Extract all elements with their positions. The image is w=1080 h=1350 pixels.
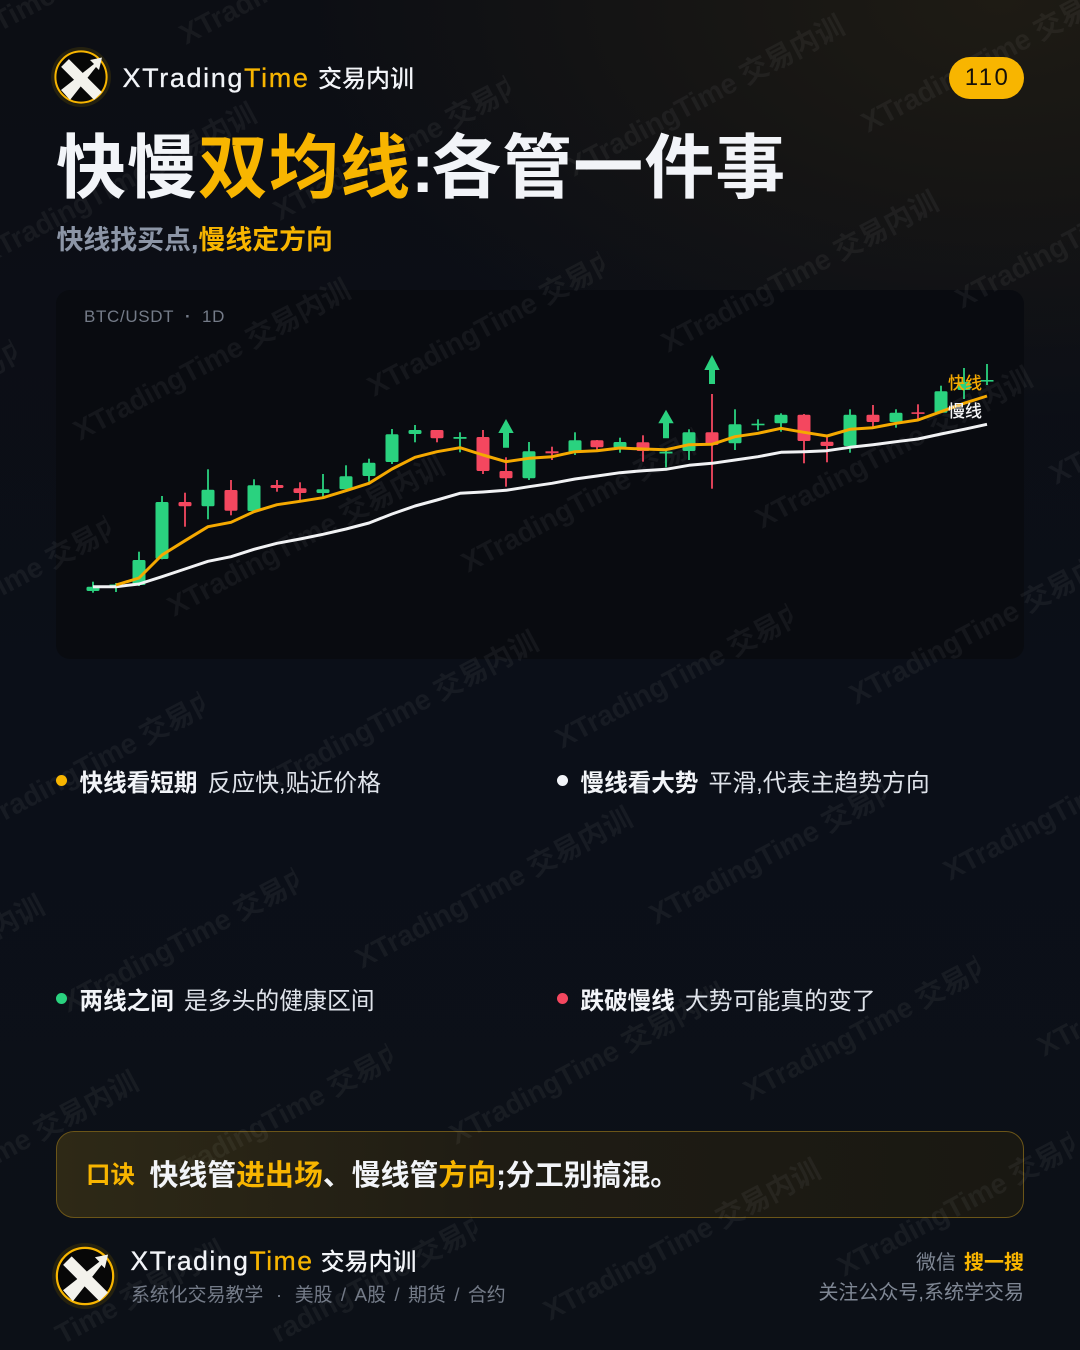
callout text: 快线管进出场、慢线管方向;分工别搞混。: [150, 1160, 679, 1192]
footer follow text: 关注公众号,系统学交易: [818, 1282, 1024, 1304]
watermark layer: XTradingTime 交易内训: [56, 846, 344, 1019]
icon: header logo: [51, 47, 111, 107]
watermark layer: XTradingTime 交易内训: [362, 230, 650, 403]
watermark layer: radingTime 交易内训: [266, 1192, 523, 1349]
footer tagline: 系统化交易教学 · 美股 / A股 / 期货 / 合约: [131, 1285, 506, 1306]
arrow: buy signal 2: [658, 410, 674, 438]
watermark layer: Time 交易内训: [50, 1235, 231, 1350]
bullet: fast line: [56, 770, 381, 797]
dot: [557, 775, 568, 786]
footer wechat search: 微信 搜一搜: [916, 1252, 1024, 1274]
watermark layer: XTradingTime 交易内训: [738, 934, 1026, 1107]
line: fast moving average: [116, 396, 987, 585]
watermark layer: XTradingTime 交易内训: [562, 10, 850, 183]
green candles: [86, 364, 994, 593]
red candles: [178, 394, 924, 527]
text: 两线之间 是多头的健康区间: [80, 988, 375, 1015]
watermark layer: XTradingTime 交易内训: [444, 978, 732, 1151]
callout label: 口诀: [86, 1162, 135, 1189]
panel: callout background: [56, 1131, 1024, 1218]
panel: chart background: [56, 290, 1024, 659]
watermark layer: XTradingTime 交易内训: [268, 54, 556, 227]
arrow: buy signal 1: [498, 419, 514, 448]
chart label: BTC/USDT · 1D: [84, 307, 225, 326]
watermark layer: XTradingTime 交易内训: [750, 362, 1038, 535]
chart: candlesticks with moving averages: [86, 355, 994, 593]
watermark layer: XTradingTime 交易内训: [538, 1154, 826, 1327]
arrow: buy signal 3: [704, 355, 720, 384]
watermark layer: XTradingTime 交易内训: [350, 802, 638, 975]
bullet: between lines: [56, 988, 375, 1015]
watermark layer: XTradingTime 交易内训: [256, 626, 544, 799]
dot: [56, 775, 67, 786]
watermark layer: XTradingTime 交易内训: [644, 758, 932, 931]
watermark layer: XTradingTime 交易内训: [656, 186, 944, 359]
line: slow moving average: [93, 424, 987, 587]
issue badge: 110: [965, 64, 1010, 91]
issue badge: [949, 57, 1024, 99]
watermark layer: XTradingTime 交易内训: [550, 582, 838, 755]
label: slow line: 慢线: [948, 402, 982, 421]
label: fast line: 快线: [948, 374, 982, 393]
watermark layer: XTradingTime 交易内训: [150, 1022, 438, 1195]
bullet: slow line: [557, 770, 930, 797]
subtitle: 快线找买点,慢线定方向: [56, 225, 333, 255]
brand name: XTradingTime 交易内训: [122, 63, 414, 93]
watermark layer: XTradingTime 交易内训: [456, 406, 744, 579]
watermark layer: XTradingTime 交易内训: [68, 274, 356, 447]
text: 快线看短期 反应快,贴近价格: [80, 770, 381, 797]
title: 快慢双均线:各管一件事: [56, 129, 786, 207]
text: 跌破慢线 大势可能真的变了: [580, 988, 876, 1015]
bullet: break below slow line: [557, 988, 876, 1015]
footer brand name: XTradingTime 交易内训: [130, 1246, 417, 1276]
dot: [557, 993, 568, 1004]
dot: [56, 993, 67, 1004]
icon: footer logo: [52, 1243, 118, 1309]
watermark layer: XTradingTime 交易内训: [162, 450, 450, 623]
text: 慢线看大势 平滑,代表主趋势方向: [580, 770, 930, 797]
